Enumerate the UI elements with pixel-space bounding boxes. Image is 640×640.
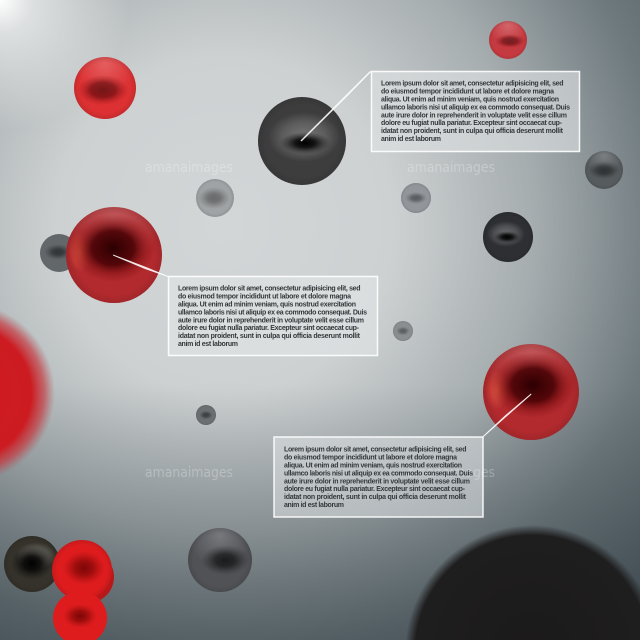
text block: middle: anim id est laborum: [178, 341, 238, 348]
watermark: top right: amanaimages: [407, 160, 495, 176]
text block: middle: do eiusmod tempor incididunt ut labore et dolore magna: [178, 294, 351, 301]
text block: middle: idatat non proident, sunt in culpa qui officia deserunt mollit: [178, 333, 361, 340]
text block: lower: aute irure dolor in reprehenderit in voluptate velit esse cillum: [284, 478, 470, 485]
text block: top right: idatat non proident, sunt in culpa qui officia deserunt mollit: [381, 128, 564, 135]
sphere: large black: [258, 97, 346, 185]
text block: top right: [381, 81, 570, 143]
sphere: large red right: [483, 344, 579, 440]
text block: middle: Lorem ipsum dolor sit amet, consectetur adipisicing elit, sed: [178, 286, 360, 293]
sphere: dark grey right: [585, 151, 623, 189]
panel: top right text box: [372, 72, 580, 152]
text block: top right: aute irure dolor in reprehenderit in voluptate velit esse cillum: [381, 112, 567, 119]
text block: lower: aliqua. Ut enim ad minim veniam, quis nostrud exercitation: [284, 462, 462, 470]
text block: lower: ullamco laboris nisi ut aliquip ex ea commodo consequat. Duis: [284, 470, 473, 477]
text block: top right: anim id est laborum: [381, 136, 441, 143]
callout: pointer line to black sphere: [300, 71, 371, 142]
text block: lower: Lorem ipsum dolor sit amet, consectetur adipisicing elit, sed: [284, 447, 466, 454]
callout: pointer line to right red sphere: [482, 394, 532, 437]
text block: middle: aliqua. Ut enim ad minim veniam, quis nostrud exercitation: [178, 302, 356, 308]
text block: lower: idatat non proident, sunt in culpa qui officia deserunt mollit: [284, 494, 467, 501]
sphere: small red top left: [74, 57, 136, 119]
text block: lower: dolore eu fugiat nulla pariatur. Excepteur sint occaecat cup-: [284, 486, 466, 493]
sphere: blurred black bottom right: [400, 522, 640, 640]
text block: middle: ullamco laboris nisi ut aliquip ex ea commodo consequat. Duis: [178, 309, 367, 316]
watermark: top left: amanaimages: [145, 160, 233, 176]
text block: top right: aliqua. Ut enim ad minim veniam, quis nostrud exercitation: [381, 96, 559, 104]
sphere: dark grey bottom: [188, 528, 252, 592]
text block: lower: do eiusmod tempor incididunt ut labore et dolore magna: [284, 455, 457, 462]
text block: lower: anim id est laborum: [284, 502, 344, 509]
text block: top right: dolore eu fugiat nulla pariatur. Excepteur sint occaecat cup-: [381, 120, 563, 127]
sphere: tiny dark grey lower: [196, 405, 216, 425]
text block: lower: [284, 447, 473, 509]
text block: top right: do eiusmod tempor incididunt ut labore et dolore magna: [381, 89, 554, 96]
text block: middle: [178, 286, 367, 348]
text block: middle: aute irure dolor in reprehenderit in voluptate velit esse cillum: [178, 317, 364, 324]
text block: top right: Lorem ipsum dolor sit amet, consectetur adipisicing elit, sed: [381, 81, 564, 88]
sphere: grey upper centre: [196, 179, 234, 217]
sphere: small red top right: [489, 21, 527, 59]
sphere: blurred red left edge: [0, 303, 55, 483]
sphere: red cluster: [52, 540, 114, 640]
sphere: tiny grey centre: [393, 321, 413, 341]
sphere: grey upper right: [401, 183, 431, 213]
callout: pointer line to left red sphere: [113, 254, 168, 277]
text block: middle: dolore eu fugiat nulla pariatur. Excepteur sint occaecat cup-: [178, 325, 360, 332]
sphere: dark grey behind red: [40, 234, 78, 272]
text block: top right: ullamco laboris nisi ut aliquip ex ea commodo consequat. Duis: [381, 104, 570, 111]
sphere: black right: [483, 212, 533, 262]
sphere: large red left: [66, 207, 162, 303]
panel: lower text box: [274, 437, 495, 517]
panel: middle text box: [168, 276, 378, 356]
sphere: black bottom left: [4, 536, 60, 592]
watermark: over lower box: amanaimages: [407, 465, 495, 481]
watermark: bottom left: amanaimages: [145, 465, 233, 481]
